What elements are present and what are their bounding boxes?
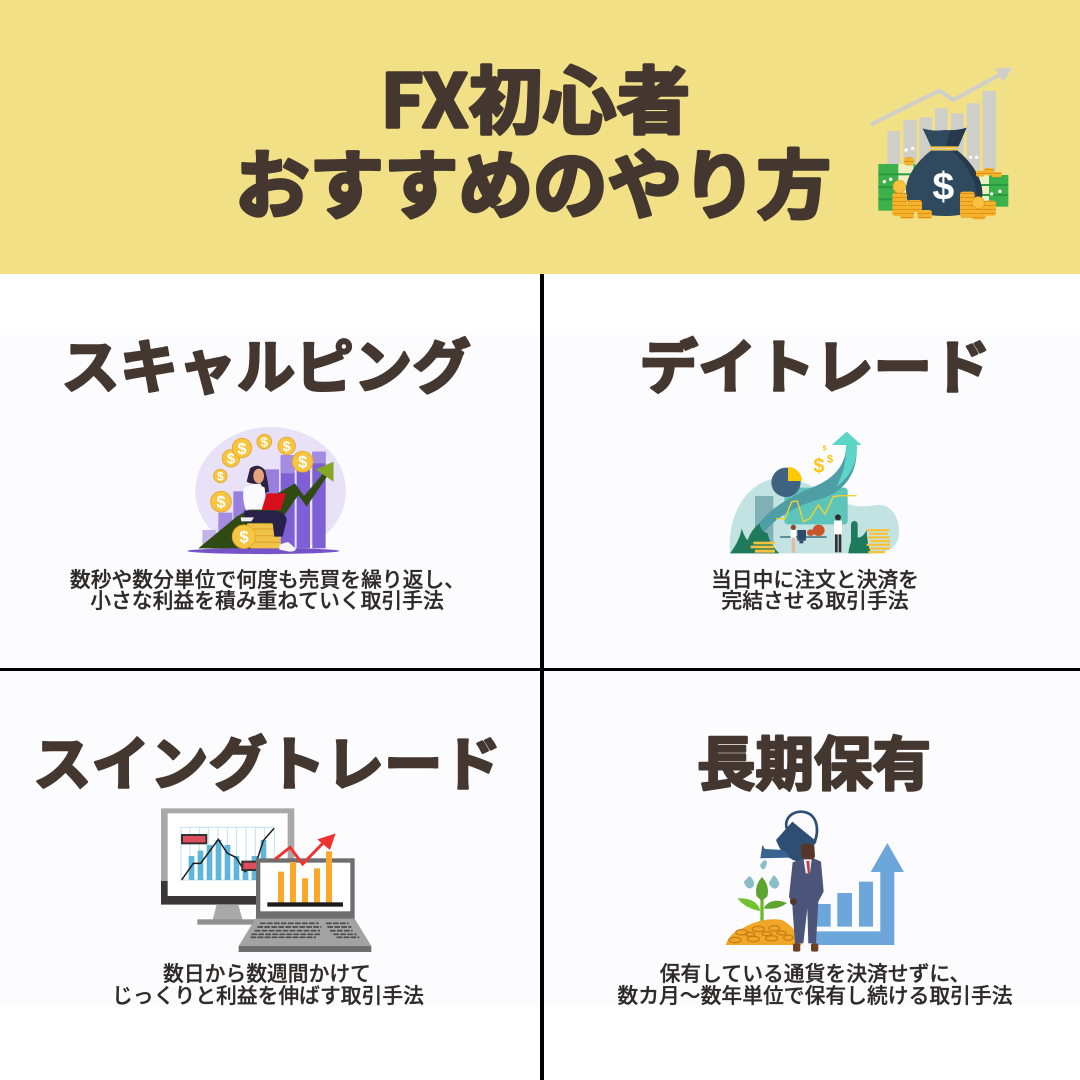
description: long-term holding: 保有している通貨を決済せずに、 [660, 957, 970, 987]
description: swing trade: じっくりと利益を伸ばす取引手法 [112, 979, 424, 1009]
icon: woman with laptop on coins and rising chart: $ [217, 469, 224, 483]
icon: woman with laptop on coins and rising chart: $ [261, 435, 268, 449]
icon: woman with laptop on coins and rising chart: $ [227, 452, 235, 468]
icon: desktop monitor and laptop with charts [161, 808, 371, 952]
icon: team viewing chart with rising arrow: $ [827, 453, 834, 465]
icon: woman with laptop on coins and rising chart: $ [238, 441, 247, 458]
icon: woman with laptop on coins and rising chart: $ [216, 492, 226, 511]
description: day trade: 当日中に注文と決済を [711, 563, 919, 593]
description: swing trade [112, 957, 424, 1009]
description: scalping: 小さな利益を積み重ねていく取引手法 [90, 584, 444, 614]
panel: day trade [639, 320, 991, 614]
icon: team viewing chart with rising arrow: $ [813, 456, 825, 478]
heading: day trade: デイトレード [639, 320, 991, 405]
panel: long-term holding [617, 717, 1013, 1009]
description: scalping [70, 563, 465, 614]
icon: woman with laptop on coins and rising chart: $ [283, 438, 291, 454]
icon: money bag with rising chart [871, 68, 1012, 219]
panel: scalping [61, 320, 471, 614]
heading: long-term holding: 長期保有 [697, 717, 931, 802]
icon: team viewing chart with rising arrow: $ [823, 444, 827, 453]
icon: woman with laptop on coins and rising chart [187, 427, 346, 555]
description: scalping: 数秒や数分単位で何度も売買を繰り返し、 [70, 563, 465, 593]
description: day trade [711, 563, 919, 614]
description: long-term holding [617, 957, 1013, 1009]
panel: swing trade [33, 717, 501, 1009]
icon: woman with laptop on coins and rising chart: $ [298, 453, 308, 472]
header band [0, 0, 1080, 274]
heading: scalping: スキャルピング [61, 320, 471, 405]
icon: woman with laptop on coins and rising chart: $ [239, 528, 249, 547]
title [235, 43, 831, 234]
icon: money bag with rising chart: $ [932, 164, 954, 208]
description: long-term holding: 数カ月～数年単位で保有し続ける取引手法 [617, 979, 1013, 1009]
title: おすすめのやり方 [235, 127, 831, 234]
description: day trade: 完結させる取引手法 [721, 584, 909, 614]
heading: swing trade: スイングトレード [33, 717, 501, 802]
title: FX初心者 [381, 43, 691, 149]
icon: team viewing chart with rising arrow [730, 432, 899, 553]
icon: businessman watering coin plant with growth arrow [726, 812, 904, 952]
description: swing trade: 数日から数週間かけて [163, 957, 371, 987]
